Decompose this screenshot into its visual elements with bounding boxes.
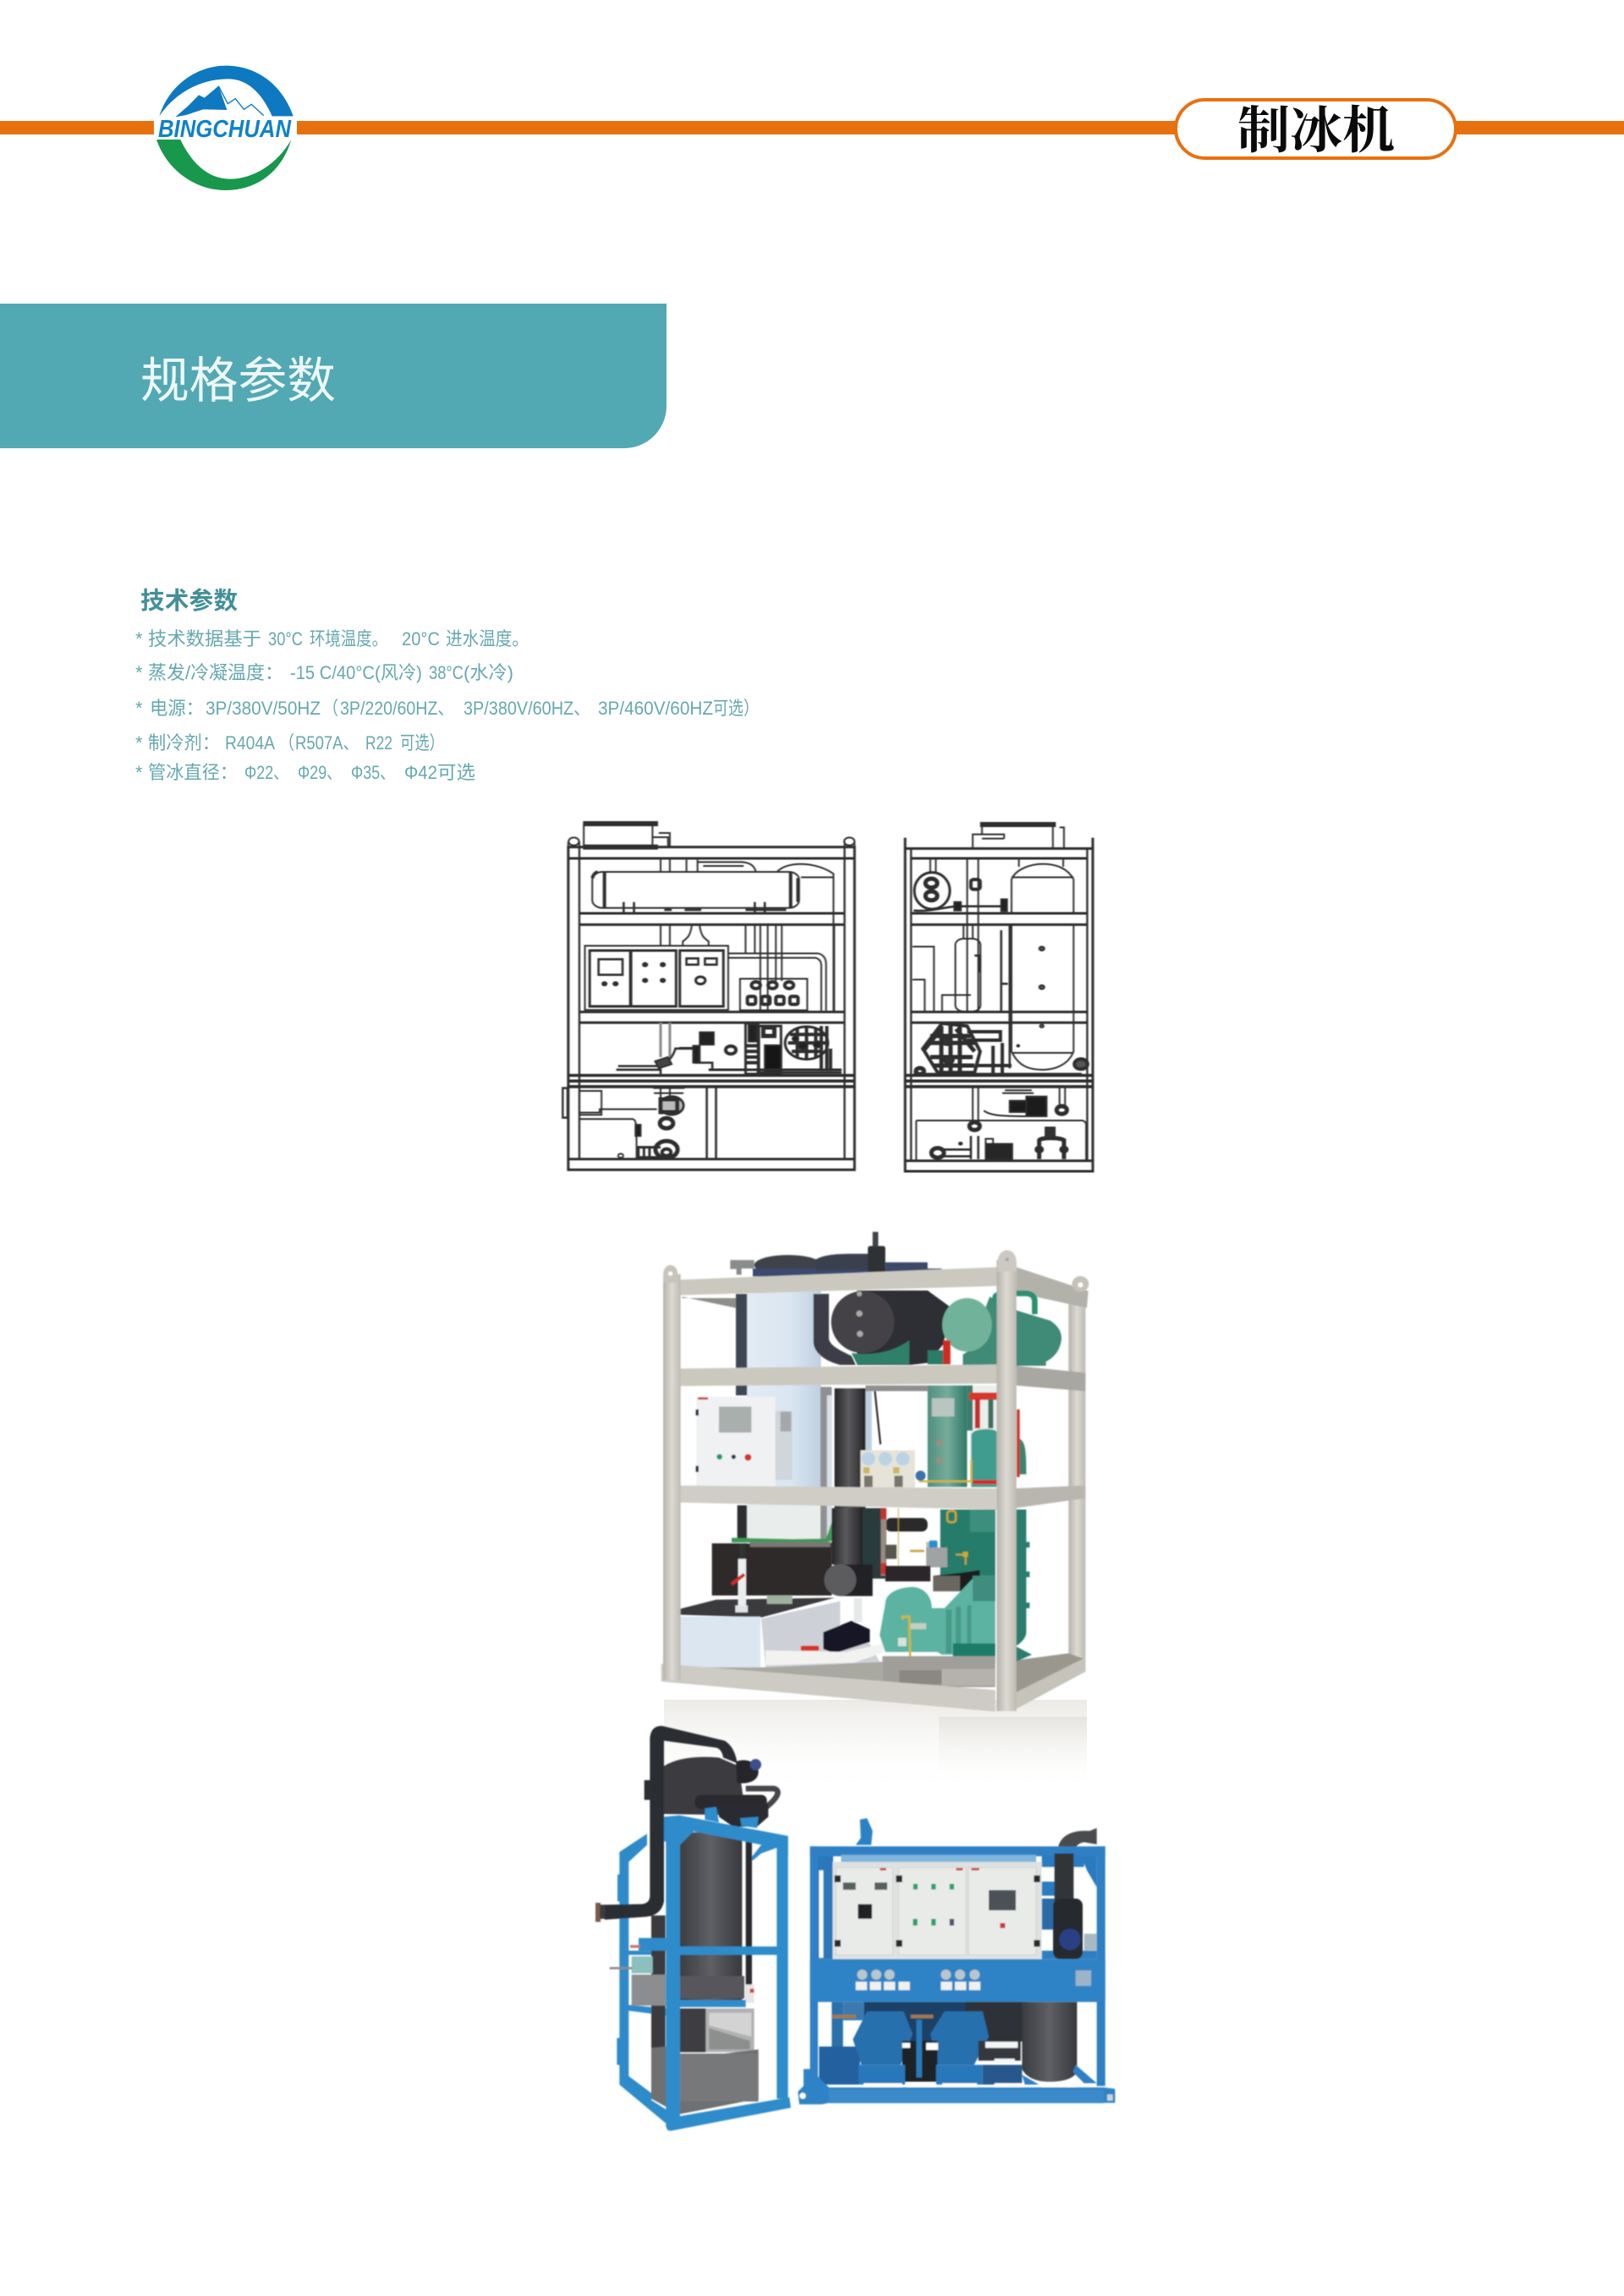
- technical parameters text: *: [135, 628, 143, 649]
- technical parameters text: (水冷): [464, 662, 513, 683]
- technical parameters text: 3P/220/60HZ、: [340, 698, 454, 719]
- technical parameters text: 技术参数: [140, 588, 238, 615]
- technical parameters text: 3P/460V/60HZ: [598, 698, 713, 719]
- technical drawing: front and side views: [562, 824, 1093, 1171]
- technical parameters text: 蒸发/冷凝温度：: [148, 662, 283, 683]
- rear plumbing: [610, 1915, 667, 2072]
- product label pill: [1176, 100, 1456, 159]
- technical parameters text: R507A、: [295, 732, 359, 753]
- evaporator cylinder: [651, 1833, 759, 2114]
- technical parameters text: 可选）: [713, 698, 759, 719]
- technical parameters text: 管冰直径：: [148, 762, 238, 783]
- technical parameters text: (风冷): [375, 662, 422, 683]
- header bar: [0, 121, 1624, 134]
- water collector and pump: [679, 1508, 884, 1683]
- technical parameters text: *: [135, 762, 143, 783]
- technical parameters text: *: [135, 698, 143, 719]
- ice tube cylinder: [730, 1232, 941, 1545]
- technical parameters text: 电源：: [150, 698, 204, 719]
- valve gauges: [860, 1450, 925, 1491]
- photo: blue skid condensing unit: [798, 1818, 1115, 2104]
- technical parameters text: Φ35、: [351, 762, 395, 783]
- technical parameters text: 30°C: [268, 628, 303, 649]
- photo: stainless steel frame tube ice machine: [661, 1232, 1089, 1712]
- technical parameters text: *: [135, 732, 143, 753]
- photo: blue frame evaporator tower: [595, 1726, 791, 2131]
- technical parameters text: 技术数据基于: [148, 628, 261, 649]
- logo: Bingchuan: [156, 66, 294, 190]
- technical parameters text: （: [279, 732, 294, 753]
- section banner: 规格参数: [140, 353, 336, 408]
- section banner: [0, 304, 667, 448]
- compressor: [880, 1575, 996, 1687]
- skid top and pipe: [810, 1818, 1106, 2086]
- logo: Bingchuan: BINGCHUAN: [158, 116, 292, 143]
- green condenser tanks: [919, 1293, 1062, 1662]
- front view frame: [562, 824, 854, 1170]
- technical parameters text: 3P/380V/50HZ: [206, 698, 321, 719]
- control box: [696, 1397, 793, 1490]
- technical parameters text: Φ29、: [298, 762, 342, 783]
- front frame: [619, 1807, 791, 2131]
- technical parameters text: R22: [365, 732, 392, 753]
- technical parameters text: 制冷剂：: [148, 732, 220, 753]
- lower plumbing: [863, 1508, 979, 1592]
- front frame: [661, 1250, 1017, 1712]
- technical parameters text: [135, 588, 759, 783]
- technical parameters text: 3P/380V/60HZ、: [464, 698, 590, 719]
- technical parameters text: 可选: [437, 762, 475, 783]
- technical parameters text: （: [323, 698, 338, 719]
- side view frame: [905, 825, 1093, 1171]
- technical parameters text: 进水温度。: [446, 628, 529, 649]
- skid gauge band: [810, 1959, 1106, 2002]
- technical parameters text: R404A: [225, 732, 275, 753]
- photo reflection under steel machine: [664, 1700, 1087, 1793]
- technical parameters text: 环境温度。: [310, 628, 387, 649]
- technical parameters text: 20°C: [402, 628, 440, 649]
- technical parameters text: Φ22、: [244, 762, 288, 783]
- technical parameters text: -15 C/40°C: [290, 662, 375, 683]
- technical parameters text: Φ42: [404, 762, 437, 783]
- rear frame: [683, 1267, 1089, 1711]
- evaporator top: [595, 1726, 778, 1922]
- technical parameters text: 可选）: [400, 732, 444, 753]
- product label pill: 制冰机: [1237, 103, 1395, 159]
- insulated pipes and receiver: [814, 1290, 952, 1569]
- technical parameters text: 38°C: [429, 662, 464, 683]
- skid control panel: [832, 1855, 1042, 1959]
- skid base: [798, 2069, 1115, 2104]
- rear frame: [617, 1833, 776, 2124]
- technical parameters text: *: [135, 662, 143, 683]
- skid compressors and receiver: [819, 2002, 1097, 2085]
